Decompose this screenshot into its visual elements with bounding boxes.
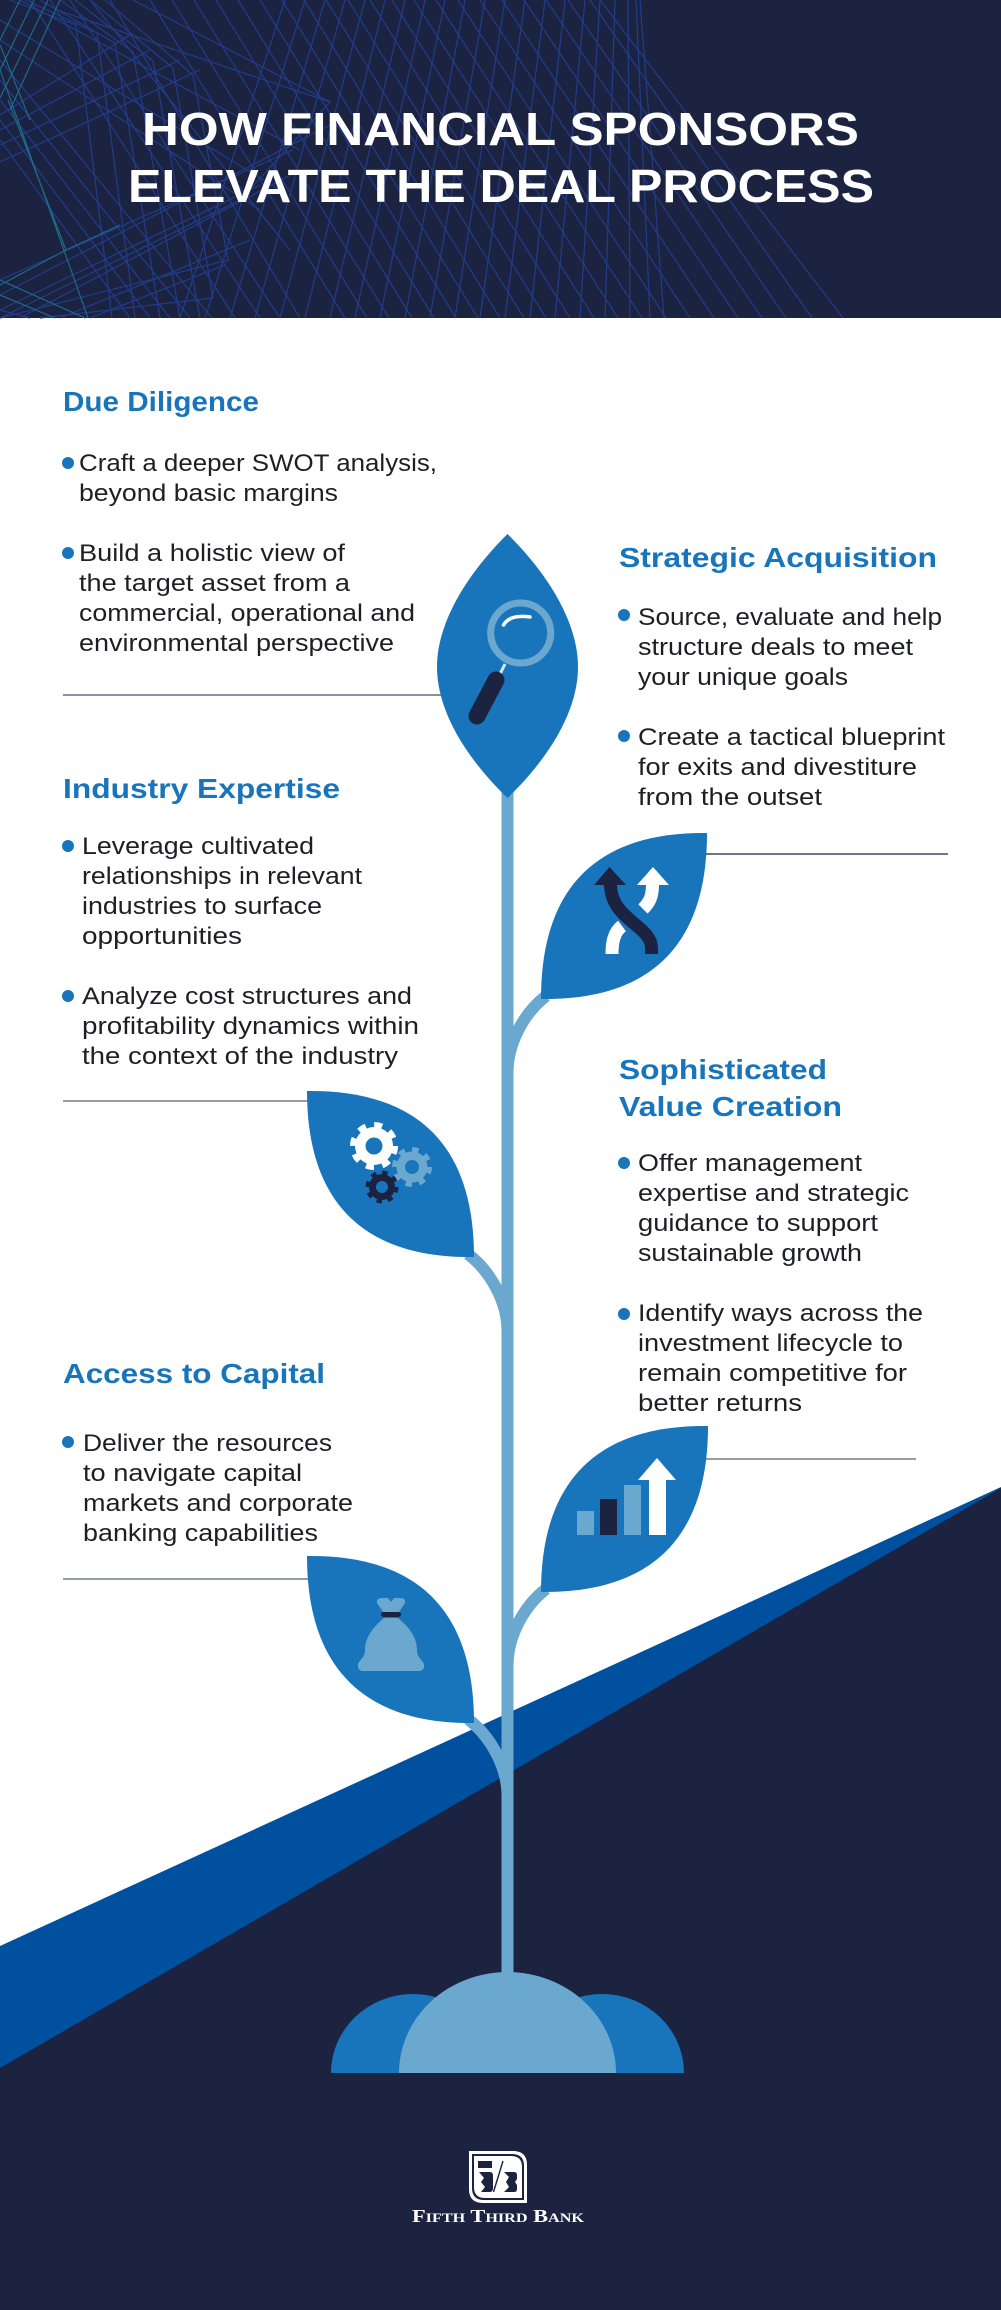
leaf: due diligence with magnifier icon <box>437 534 578 798</box>
bullet list: sophisticated value creation: Offer management <box>638 1150 862 1177</box>
icon: money bag <box>358 1598 424 1671</box>
bullet list: strategic acquisition: for exits and divestiture <box>638 754 917 781</box>
bullet list: industry expertise: profitability dynamics within <box>82 1013 419 1040</box>
icon: crossing arrows <box>594 867 669 954</box>
bullet list: due diligence: beyond basic margins <box>79 480 338 507</box>
bullet list: strategic acquisition: Create a tactical blueprint <box>638 724 945 751</box>
leaf: value creation with growth chart icon <box>541 1426 708 1592</box>
bullet list: due diligence: commercial, operational and <box>79 600 415 627</box>
leaf: access to capital with money bag icon <box>307 1556 474 1723</box>
icon: gears <box>353 1125 430 1202</box>
bullet list: sophisticated value creation <box>618 1150 923 1417</box>
bullet list: sophisticated value creation: Identify ways across the <box>638 1300 923 1327</box>
title <box>128 103 874 212</box>
panel: strategic acquisition <box>618 542 945 811</box>
bullet list: sophisticated value creation: expertise and strategic <box>638 1180 909 1207</box>
bullet list: sophisticated value creation: guidance to support <box>638 1210 878 1237</box>
heading: sophisticated value creation: Value Creation <box>619 1091 842 1122</box>
bullet list: sophisticated value creation: sustainable growth <box>638 1240 862 1267</box>
icon: bank emblem <box>469 2151 527 2203</box>
heading: sophisticated value creation: Sophisticated <box>619 1054 827 1085</box>
bullet list: access to capital <box>62 1430 353 1547</box>
bullet list: access to capital: markets and corporate <box>83 1490 353 1517</box>
heading: sophisticated value creation <box>619 1054 842 1122</box>
bullet list: access to capital: to navigate capital <box>83 1460 302 1487</box>
icon: bar chart with arrow <box>577 1458 676 1535</box>
bullet list: due diligence: environmental perspective <box>79 630 394 657</box>
heading: due diligence: Due Diligence <box>63 386 259 417</box>
bullet list: strategic acquisition: Source, evaluate and help <box>638 604 942 631</box>
heading: access to capital: Access to Capital <box>63 1358 325 1389</box>
leaf: industry expertise with gears icon <box>307 1091 474 1257</box>
panel: sophisticated value creation <box>618 1054 923 1417</box>
stem and branches <box>468 790 546 1985</box>
bullet list: due diligence <box>62 450 437 657</box>
bullet list: due diligence: Build a holistic view of <box>79 540 345 567</box>
bullet list: strategic acquisition: your unique goals <box>638 664 848 691</box>
title: ELEVATE THE DEAL PROCESS <box>128 160 874 212</box>
heading: industry expertise: Industry Expertise <box>63 773 340 804</box>
soil mounds <box>331 1972 684 2073</box>
panel: industry expertise <box>62 773 419 1070</box>
heading: strategic acquisition: Strategic Acquisition <box>619 542 937 573</box>
bullet list: industry expertise: relationships in relevant <box>82 863 362 890</box>
bullet list: due diligence: the target asset from a <box>79 570 351 597</box>
bullet list: strategic acquisition: from the outset <box>638 784 822 811</box>
header banner <box>0 0 1001 318</box>
logo: fifth third bank <box>412 2151 585 2226</box>
bullet list: strategic acquisition: structure deals to meet <box>638 634 913 661</box>
bullet list: sophisticated value creation: better returns <box>638 1390 802 1417</box>
navy ground <box>0 1488 1001 2310</box>
bullet list: industry expertise: the context of the industry <box>82 1043 398 1070</box>
wordmark: Fifth Third Bank <box>412 2206 585 2226</box>
panel: due diligence <box>62 386 437 657</box>
icon: magnifying glass <box>477 603 551 716</box>
bullet list: industry expertise: Leverage cultivated <box>82 833 314 860</box>
diagonal blue band <box>0 1487 1001 2080</box>
title: HOW FINANCIAL SPONSORS <box>142 103 859 155</box>
bullet list: industry expertise: industries to surface <box>82 893 322 920</box>
bullet list: strategic acquisition <box>618 604 945 811</box>
bullet list: access to capital: banking capabilities <box>83 1520 318 1547</box>
panel: access to capital <box>62 1358 353 1547</box>
bullet list: industry expertise: Analyze cost structures and <box>82 983 412 1010</box>
bullet list: sophisticated value creation: remain competitive for <box>638 1360 907 1387</box>
bullet list: industry expertise <box>62 833 419 1070</box>
leaf: strategic acquisition with crossing arrows icon <box>541 833 707 999</box>
bullet list: due diligence: Craft a deeper SWOT analysis, <box>79 450 437 477</box>
bullet list: sophisticated value creation: investment lifecycle to <box>638 1330 903 1357</box>
bullet list: industry expertise: opportunities <box>82 923 242 950</box>
bullet list: access to capital: Deliver the resources <box>83 1430 332 1457</box>
